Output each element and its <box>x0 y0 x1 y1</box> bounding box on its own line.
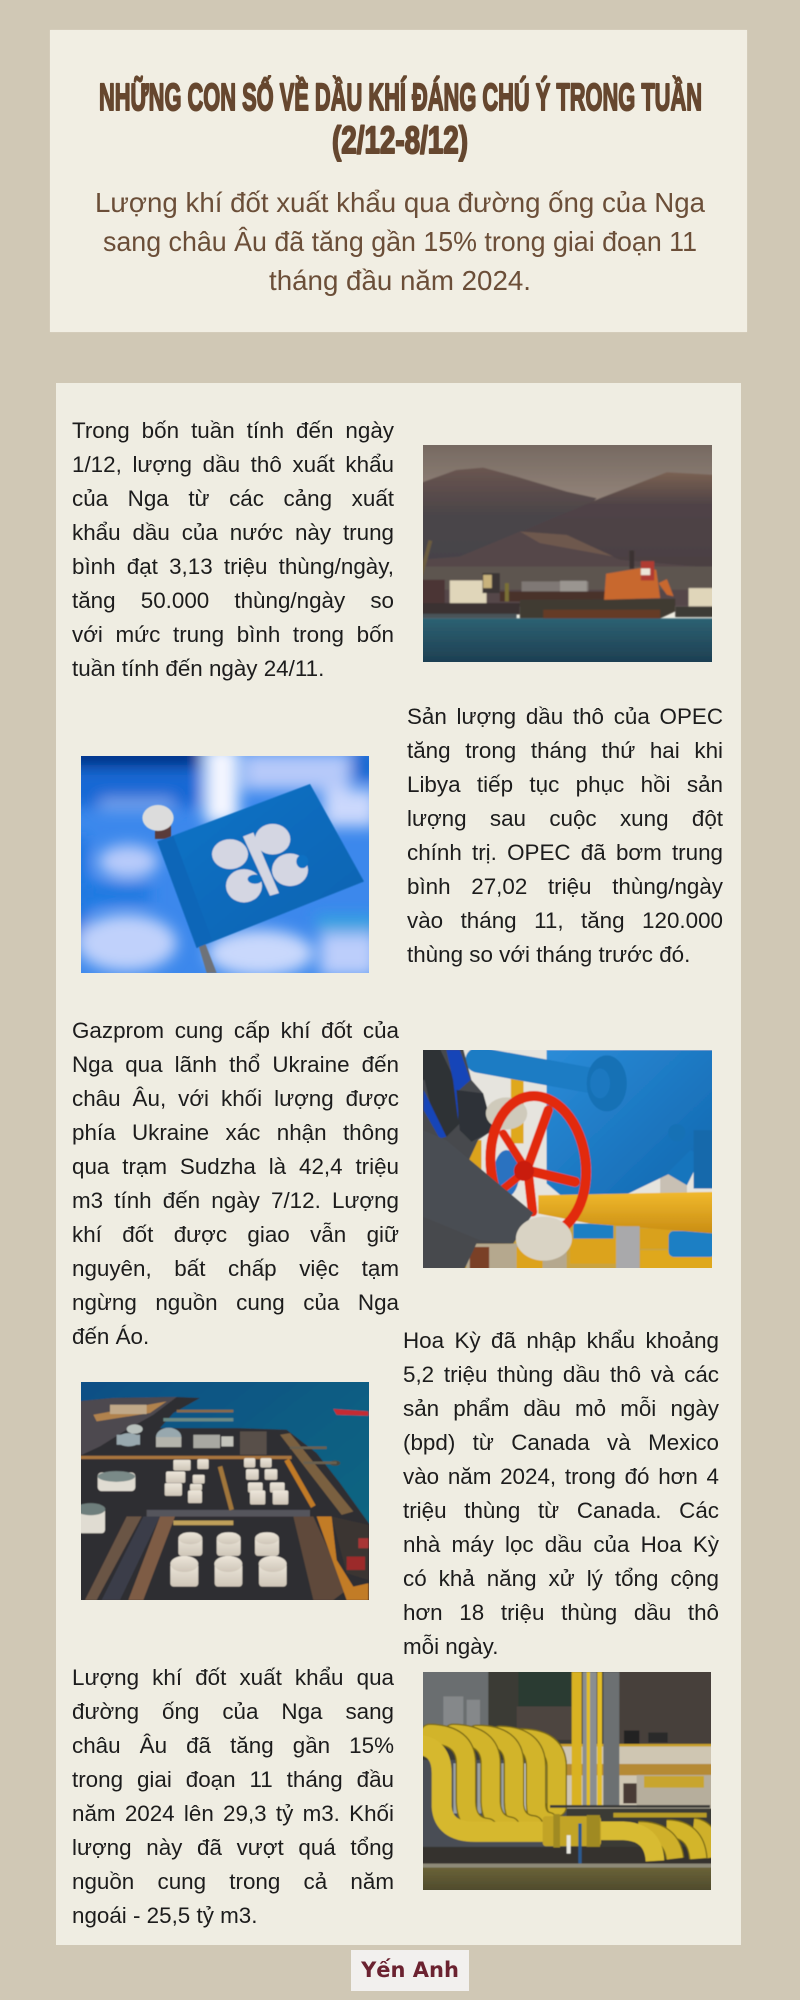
text block: Russian crude exports: 1/12, lượng dầu thô xuất khẩu <box>72 452 394 477</box>
image: port with tanker and mountains <box>423 445 712 662</box>
text block: Russian crude exports <box>72 418 394 681</box>
text block: Russian pipeline gas: lượng này đã vượt quá tổng <box>72 1835 394 1860</box>
text block: US imports: triệu thùng từ Canada. Các <box>403 1498 719 1523</box>
text block: Gazprom via Ukraine: đến Áo. <box>72 1324 149 1349</box>
subtitle: sang châu Âu đã tăng gần 15% trong giai đoạn 11 <box>103 226 697 257</box>
image: OPEC flag <box>81 756 369 973</box>
author badge <box>351 1950 469 1991</box>
text block: US imports: 5,2 triệu thùng dầu thô và các <box>403 1362 719 1387</box>
text block: Gazprom via Ukraine: Gazprom cung cấp khí đốt của <box>72 1018 399 1043</box>
text block: US imports: sản phẩm dầu mỏ mỗi ngày <box>403 1396 719 1421</box>
text block: Gazprom via Ukraine: châu Âu, với khối lượng được <box>72 1086 399 1111</box>
text block: OPEC output: chính trị. OPEC đã bơm trung <box>407 840 723 865</box>
image: yellow gas pipelines <box>423 1672 711 1890</box>
panel: main content <box>56 383 741 1945</box>
text block: US imports <box>403 1328 719 1659</box>
title <box>99 74 702 162</box>
text block: Gazprom via Ukraine: nguyên, bất chấp việc tạm <box>72 1256 399 1281</box>
text block: US imports: hơn 18 triệu thùng dầu thô <box>403 1600 719 1625</box>
text block: Gazprom via Ukraine: m3 tính đến ngày 7/12. Lượng <box>72 1188 399 1213</box>
text block: OPEC output: Libya tiếp tục phục hồi sản <box>407 772 723 797</box>
text block: Gazprom via Ukraine: Nga qua lãnh thổ Ukraine đến <box>72 1052 399 1077</box>
text block: US imports: mỗi ngày. <box>403 1634 498 1659</box>
text block: Russian pipeline gas: ngoái - 25,5 tỷ m3. <box>72 1903 257 1928</box>
text block: Russian crude exports: tăng 50.000 thùng/ngày so <box>72 588 394 613</box>
text block: Russian crude exports: của Nga từ các cảng xuất <box>72 486 394 511</box>
text block: Russian pipeline gas: trong giai đoạn 11 tháng đầu <box>72 1767 394 1792</box>
text block: Russian pipeline gas: năm 2024 lên 29,3 tỷ m3. Khối <box>72 1801 394 1826</box>
text block: Russian pipeline gas: châu Âu đã tăng gần 15% <box>72 1733 394 1758</box>
title: (2/12-8/12) <box>332 120 468 162</box>
text block: Gazprom via Ukraine: phía Ukraine xác nhận thông <box>72 1120 399 1145</box>
subtitle: tháng đầu năm 2024. <box>269 265 531 296</box>
image: refinery tank farm at dusk <box>81 1382 369 1600</box>
text block: Russian pipeline gas: Lượng khí đốt xuất khẩu qua <box>72 1665 394 1690</box>
text block: OPEC output: Sản lượng dầu thô của OPEC <box>407 704 723 729</box>
text block: OPEC output: tăng trong tháng thứ hai khi <box>407 738 723 763</box>
subtitle <box>95 187 705 296</box>
text block: US imports: vào năm 2024, trong đó hơn 4 <box>403 1464 719 1489</box>
text block: US imports: có khả năng xử lý tổng cộng <box>403 1566 719 1591</box>
author badge: Yến Anh <box>361 1958 459 1982</box>
text block: Gazprom via Ukraine: qua trạm Sudzha là 42,4 triệu <box>72 1154 399 1179</box>
text block: Russian crude exports: với mức trung bình trong bốn <box>72 622 394 647</box>
text block: Russian pipeline gas: đường ống của Nga sang <box>72 1699 394 1724</box>
text block: Russian pipeline gas <box>72 1665 394 1928</box>
text block: Russian crude exports: tuần tính đến ngày 24/11. <box>72 656 324 681</box>
text block: US imports: (bpd) từ Canada và Mexico <box>403 1430 719 1455</box>
text block: Russian pipeline gas: nguồn cung trong cả năm <box>72 1869 394 1894</box>
subtitle: Lượng khí đốt xuất khẩu qua đường ống của Nga <box>95 187 705 218</box>
text block: US imports: Hoa Kỳ đã nhập khẩu khoảng <box>403 1328 719 1353</box>
text block: Russian crude exports: bình đạt 3,13 triệu thùng/ngày, <box>72 554 394 579</box>
text block: OPEC output: lượng sau cuộc xung đột <box>407 806 723 831</box>
text block: OPEC output: thùng so với tháng trước đó. <box>407 942 690 967</box>
text block: OPEC output <box>407 704 723 967</box>
text block: Gazprom via Ukraine: khí đốt được giao vẫn giữ <box>72 1222 399 1247</box>
text block: Gazprom via Ukraine: ngừng nguồn cung của Nga <box>72 1290 399 1315</box>
image: worker turning red valve <box>423 1050 712 1268</box>
panel: header <box>50 30 747 332</box>
text block: US imports: nhà máy lọc dầu của Hoa Kỳ <box>403 1532 719 1557</box>
text block: OPEC output: vào tháng 11, tăng 120.000 <box>407 908 723 933</box>
text block: Russian crude exports: khẩu dầu của nước này trung <box>72 520 394 545</box>
text block: OPEC output: bình 27,02 triệu thùng/ngày <box>407 874 723 899</box>
text block: Gazprom via Ukraine <box>72 1018 399 1349</box>
text block: Russian crude exports: Trong bốn tuần tính đến ngày <box>72 418 394 443</box>
